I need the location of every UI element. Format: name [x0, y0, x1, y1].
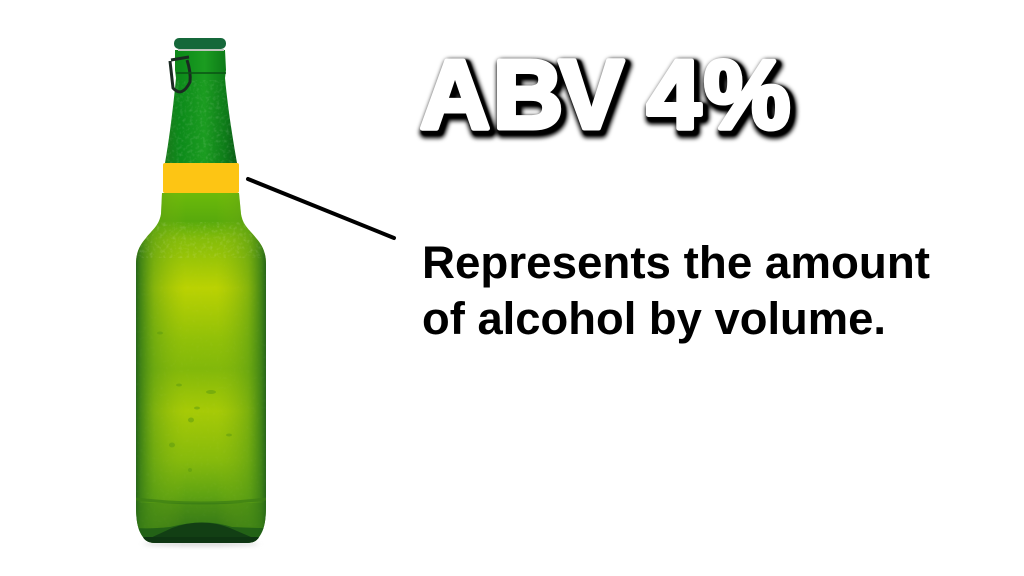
title: ABV 4%: ABV 4% [423, 43, 793, 152]
pointer line [248, 179, 394, 238]
bottle body [136, 50, 266, 543]
description text: Represents the amount [422, 237, 930, 288]
water droplets [157, 332, 232, 472]
yellow ABV band [163, 163, 239, 193]
description text: of alcohol by volume. [422, 293, 886, 344]
title: ABV 4%: ABV 4% [423, 44, 793, 153]
icon: swing-top clasp [170, 57, 190, 92]
icon: green beer bottle [130, 38, 272, 546]
ground shadow [143, 542, 259, 546]
title: ABV 4%: ABV 4% [420, 40, 790, 149]
description text [422, 237, 930, 344]
bottle cap [174, 38, 226, 49]
